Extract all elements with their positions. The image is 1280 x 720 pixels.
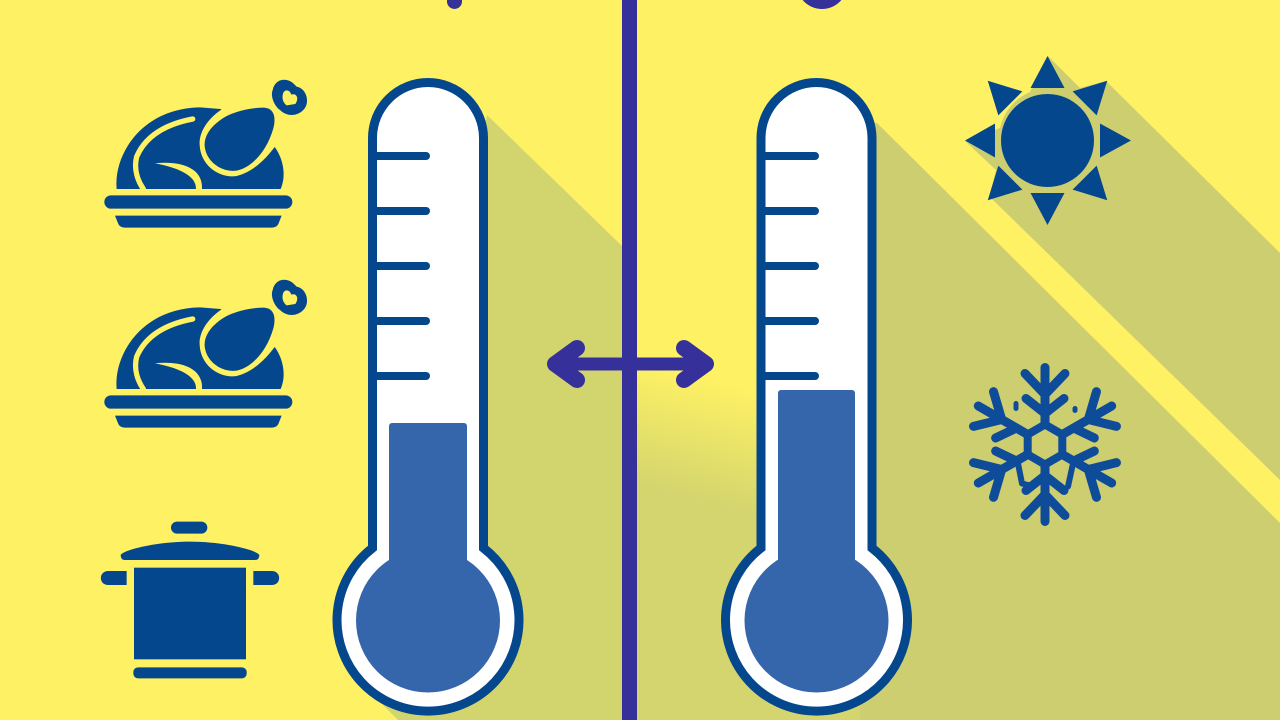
top cropped mark left	[447, 0, 462, 9]
icon: snowflake	[968, 368, 1122, 522]
thermometer right level	[744, 390, 888, 692]
double arrow	[555, 348, 706, 380]
shadow: right thermometer	[860, 123, 1280, 720]
thermometer left	[337, 82, 519, 711]
icon: roast chicken top	[104, 80, 307, 228]
thermometer right ticks	[765, 156, 815, 376]
thermometer right	[726, 82, 907, 711]
shadow: between divider and right thermometer	[637, 360, 872, 720]
thermometer right outline	[726, 82, 907, 711]
shadow: left thermometer	[375, 115, 622, 720]
top cropped mark right	[796, 0, 848, 9]
icon: cooking pot	[101, 522, 279, 678]
shadow: sun	[965, 56, 1280, 480]
thermometer left ticks	[376, 156, 426, 376]
icon: sun	[965, 56, 1131, 225]
thermometer left outline	[337, 82, 519, 711]
center divider	[622, 0, 637, 720]
thermometer left level	[356, 423, 500, 692]
icon: roast chicken middle	[104, 280, 307, 428]
